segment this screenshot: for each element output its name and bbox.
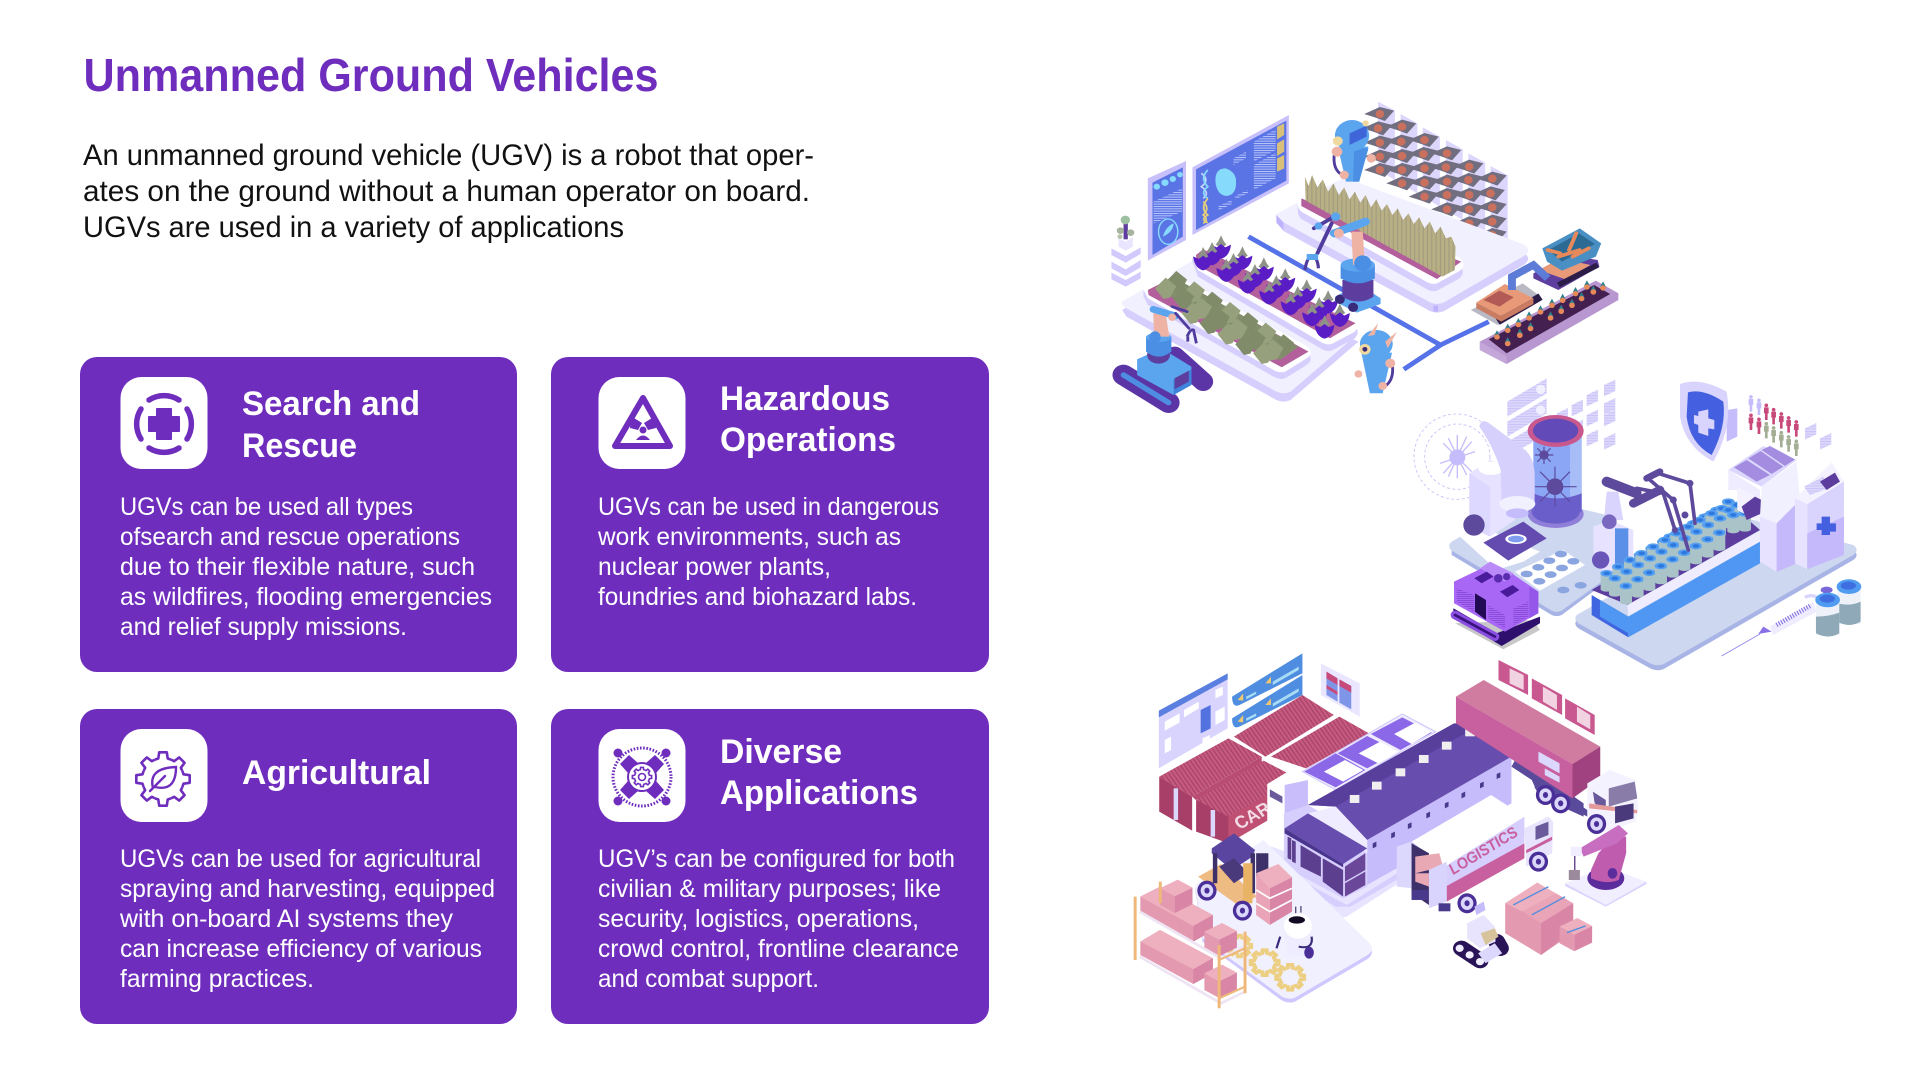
shield icon [1680, 382, 1737, 462]
heading [242, 385, 420, 465]
icon: radiation warning [598, 377, 686, 469]
storage rack [1135, 880, 1245, 1008]
icon: rescue cross [120, 377, 208, 469]
yellow gears [1228, 935, 1304, 990]
body text: ofsearch and rescue operations [120, 523, 460, 551]
intro paragraph: ates on the ground without a human operator on board. [83, 175, 810, 208]
body text: farming practices. [120, 965, 314, 993]
body text: spraying and harvesting, equipped [120, 875, 495, 903]
body text [119, 845, 495, 993]
robot: lower capsule [1355, 323, 1397, 393]
tomato wall [1362, 102, 1508, 248]
people icons [1749, 395, 1799, 456]
body text [598, 845, 959, 993]
illustration: biohazard lab [1414, 378, 1861, 670]
panel: search and rescue [80, 357, 517, 672]
leafy planter [1143, 271, 1311, 379]
analyser machine [1728, 446, 1844, 572]
body text: and relief supply missions. [120, 613, 407, 641]
conveyor [1592, 507, 1760, 637]
robot arm stand [1592, 492, 1633, 578]
heading: Diverse [720, 733, 842, 771]
virus cylinder [1528, 415, 1584, 528]
stacked pink boxes [1505, 883, 1592, 955]
centre robot arm [1305, 212, 1381, 313]
panel: hazardous operations [551, 357, 989, 672]
lab base plate [1449, 497, 1613, 616]
body text: foundries and biohazard labs. [598, 583, 917, 611]
carrot planter [1480, 280, 1618, 364]
warehouse building [1267, 723, 1511, 898]
screen: left data panel [1148, 161, 1186, 261]
title: Unmanned Ground Vehicles [84, 49, 658, 101]
dashboard screens [1159, 653, 1360, 768]
tracked purple robot [1453, 562, 1540, 649]
body text: with on-board AI systems they [119, 905, 453, 933]
screen: right data panel [1192, 115, 1289, 235]
white helper robot [1276, 906, 1314, 959]
tracked robot [1124, 307, 1203, 403]
body text: as wildfires, flooding emergencies [120, 583, 492, 611]
pallet stack [1256, 864, 1292, 925]
logistics truck: LOGISTICS [1445, 824, 1522, 878]
body text: can increase efficiency of various [120, 935, 482, 963]
cargo containers [1159, 695, 1369, 843]
heading: Operations [720, 421, 896, 459]
body text: UGVs can be used in dangerous [598, 493, 939, 521]
intro paragraph: An unmanned ground vehicle (UGV) is a robot that oper- [83, 139, 814, 172]
purple plant planter [1192, 235, 1358, 351]
intro paragraph [83, 139, 814, 244]
upper platform [1275, 177, 1528, 313]
heading: Applications [720, 774, 918, 812]
harvester vehicle [1471, 228, 1601, 325]
body text: crowd control, frontline clearance [598, 935, 959, 963]
syringe [1722, 596, 1822, 656]
cargo containers: CARGO [1230, 785, 1298, 833]
warehouse yard [1269, 847, 1402, 917]
heading: Hazardous [720, 380, 890, 418]
conveyor base plate [1575, 518, 1857, 670]
body text: and combat support. [598, 965, 819, 993]
body text [120, 493, 492, 641]
icon: diverse gear emblem [598, 729, 686, 822]
illustration: logistics [1135, 653, 1646, 1008]
illustration: agricultural robots [1111, 102, 1618, 403]
robot gripper arms [1607, 472, 1695, 550]
heading [720, 380, 896, 459]
background data cells [1507, 378, 1831, 457]
logistics truck [1397, 795, 1553, 913]
pink robot arm [1565, 825, 1646, 907]
heading: Search and [242, 385, 420, 423]
body text: UGVs can be used for agricultural [120, 845, 481, 873]
pink data cards [1498, 660, 1595, 735]
body text [597, 493, 939, 611]
pill tray [1515, 550, 1587, 593]
robot: upper capsule [1332, 120, 1376, 182]
wheat planter [1298, 175, 1463, 291]
body text: nuclear power plants, [598, 553, 831, 581]
lower platform [1122, 258, 1358, 402]
heading [720, 733, 918, 812]
vial rows [1600, 498, 1751, 604]
warehouse skylights [1302, 714, 1436, 790]
intro paragraph: UGVs are used in a variety of applications [83, 211, 624, 244]
panel: diverse applications [551, 709, 989, 1024]
virus rings [1414, 414, 1499, 499]
trailer truck [1456, 680, 1638, 834]
heading: Rescue [242, 427, 357, 465]
body text: civilian & military purposes; like [598, 875, 941, 903]
body text: due to their flexible nature, such [120, 553, 475, 581]
medicine bottles [1815, 579, 1861, 637]
body text: UGVs can be used all types [120, 493, 413, 521]
microscope [1460, 421, 1547, 570]
forklift [1197, 833, 1268, 921]
guide track [1249, 237, 1489, 369]
warehouse floor [1195, 840, 1372, 1003]
body text: work environments, such as [597, 523, 901, 551]
body text: UGV’s can be configured for both [598, 845, 955, 873]
cargo robot [1456, 902, 1500, 965]
body text: security, logistics, operations, [598, 905, 919, 933]
panel: agricultural [80, 709, 517, 1024]
plant pedestal [1111, 216, 1141, 287]
heading: Agricultural [242, 754, 431, 792]
icon: gear with leaf [120, 729, 208, 822]
